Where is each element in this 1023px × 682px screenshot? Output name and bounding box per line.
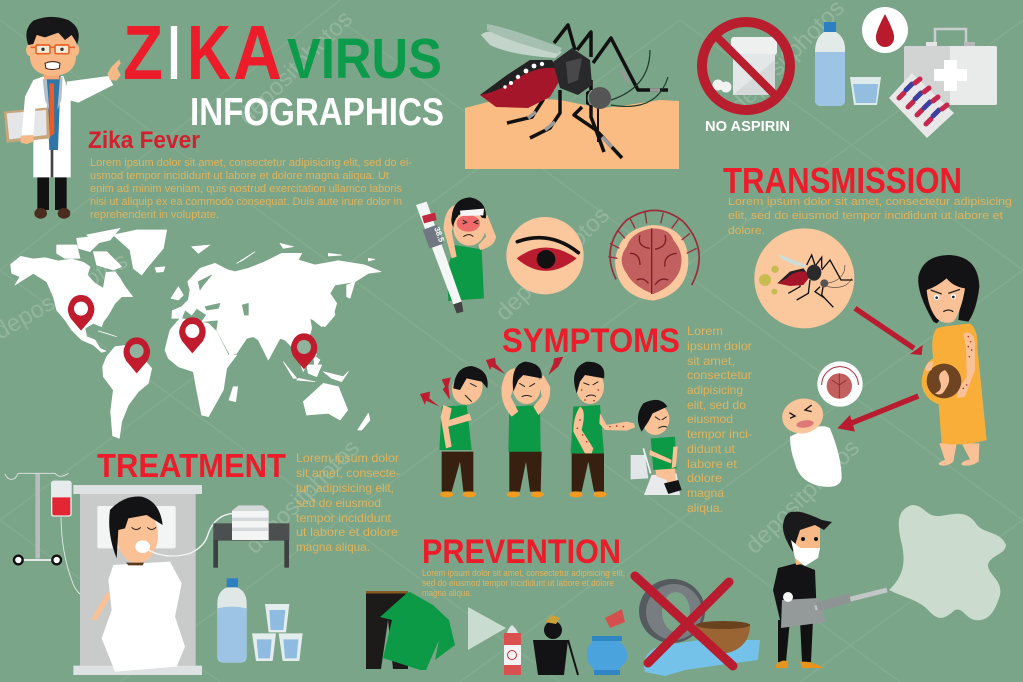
text block: prevention description: sed do eiusmod tempor incididunt ut labore et dolore: [422, 578, 614, 588]
text block: Zika Fever description: reprehenderit in voluptate.: [90, 209, 219, 221]
text block: symptoms description: magna: [687, 486, 724, 500]
text block: symptoms description: Lorem: [687, 324, 723, 338]
icon: pill blister pack: [889, 73, 954, 138]
text block: symptoms description: eiusmod: [687, 412, 733, 426]
patient: [91, 496, 185, 672]
thermometer: 38.5: [432, 226, 446, 244]
text block: treatment description: sed do eiusmod: [296, 496, 381, 510]
skin: [465, 97, 679, 169]
title: ZIKA VIRUS INFOGRAPHICS: Z: [123, 10, 163, 96]
pregnant woman: [918, 255, 987, 466]
text block: transmission description: [728, 196, 1012, 237]
pin: North America: [68, 295, 94, 331]
map: Americas and Greenland: [11, 228, 167, 438]
text block: symptoms description: labore et: [687, 457, 738, 471]
heading: TRANSMISSION: TRANSMISSION: [723, 160, 962, 201]
text block: symptoms description: elit, sed do: [687, 398, 746, 412]
icon: trash bin: [533, 615, 578, 675]
icon: glass of water: [850, 77, 881, 105]
arrow: triangle: [468, 607, 506, 650]
icon: crossed-out tyre, bowl and puddle: [635, 576, 760, 676]
icon: brain with pain arc: [608, 210, 699, 301]
text block: treatment description: sit amet, consecte-: [296, 466, 400, 480]
figure: diarrhea on toilet: [631, 400, 682, 495]
title: ZIKA VIRUS INFOGRAPHICS: K: [187, 10, 231, 96]
man spraying fog: [773, 512, 887, 668]
text block: treatment description: ut labore et dolore: [296, 525, 398, 539]
text block: symptoms description: tempor inci-: [687, 427, 752, 441]
heading: Zika Fever: Zika Fever: [88, 127, 200, 154]
oxygen tube and machine: [148, 505, 289, 568]
heading: TREATMENT: TREATMENT: [97, 447, 286, 484]
icon: insect repellent spray: [504, 625, 521, 675]
pin: Africa: [179, 317, 206, 353]
pin: South America: [124, 337, 150, 373]
text block: Zika Fever description: Lorem ipsum dolor sit amet, consectetur adipisicing elit, sed do ei-: [90, 157, 412, 169]
icon: water bottle: [815, 22, 845, 106]
heading: SYMPTOMS: SYMPTOMS: [502, 322, 680, 360]
text block: symptoms description: dolore: [687, 471, 722, 485]
text block: prevention description: [422, 568, 625, 598]
symptom icons and figures: [416, 197, 699, 497]
arrow: mother to baby: [837, 396, 918, 432]
legs: [507, 25, 668, 158]
text block: symptoms description: [687, 324, 752, 515]
transmission illustration: [754, 228, 987, 487]
watermark: depositphotos: [240, 434, 365, 559]
label: NO ASPIRIN: NO ASPIRIN: [705, 118, 790, 135]
abdomen: [480, 60, 560, 108]
text block: treatment description: magna aliqua.: [296, 540, 370, 554]
text block: symptoms description: ipsum dolor: [687, 339, 752, 353]
figure: shoulder pain: [420, 366, 488, 497]
fog cloud: [889, 505, 1006, 620]
water bottle: [217, 578, 247, 663]
title: ZIKA VIRUS INFOGRAPHICS: I: [168, 10, 180, 96]
text block: symptoms description: sit amet,: [687, 354, 735, 368]
icon: microcephaly brain: [817, 361, 863, 407]
title: ZIKA VIRUS INFOGRAPHICS: VIRUS: [287, 27, 442, 91]
text block: transmission description: dolore.: [728, 225, 765, 237]
text block: symptoms description: adipisicing: [687, 383, 743, 397]
text block: prevention description: Lorem ipsum dolor sit amet, consectetur adipisicing elit,: [422, 568, 625, 578]
world map with location pins: [11, 228, 381, 438]
treatment illustration: [5, 473, 303, 675]
thermometer: [416, 202, 463, 313]
thorax: [553, 48, 592, 95]
IV stand and drip: [5, 473, 107, 600]
watermark: [0, 0, 865, 559]
text block: transmission description: Lorem ipsum dolor sit amet, consectetur adipisicing: [728, 196, 1012, 208]
icon: water jar and litter: [587, 609, 627, 675]
figure: rash: [569, 362, 635, 497]
glasses of water: [252, 604, 303, 661]
text block: treatment description: tur, adipisicing elit,: [296, 481, 394, 495]
mosquito circle: [754, 228, 854, 328]
icon: red eye: [506, 217, 584, 294]
text block: treatment description: tempor incididunt: [296, 511, 392, 525]
icon: first aid kit: [904, 29, 997, 105]
title: ZIKA VIRUS INFOGRAPHICS: A: [233, 10, 282, 96]
watermark: depositphotos: [233, 5, 358, 130]
icon: blood drop: [862, 7, 908, 53]
doctor character: [4, 17, 121, 219]
text block: Zika Fever description: [90, 157, 412, 221]
man with fever and thermometer: [443, 197, 496, 301]
baby: [779, 395, 842, 487]
pin: South-East Asia: [291, 333, 317, 369]
text block: Zika Fever description: enim ad minim veniam, quis nostrud exercitation ullamco laboris: [90, 183, 402, 195]
hospital bed: [73, 485, 202, 675]
text block: symptoms description: aliqua.: [687, 501, 723, 515]
text block: Zika Fever description: usmod tempor incididunt ut labore et dolore magna aliqua. Ut: [90, 170, 389, 182]
watermark: depositphotos: [740, 434, 865, 559]
arrow: mosquito to mother: [855, 308, 923, 355]
icon: no aspirin: [702, 22, 790, 110]
text block: symptoms description: consectetur: [687, 368, 752, 382]
title: ZIKA VIRUS INFOGRAPHICS: [123, 10, 444, 134]
text block: transmission description: elit, sed do eiusmod tempor incididunt ut labore et: [728, 210, 1003, 222]
text block: treatment description: Lorem ipsum dolor: [296, 451, 399, 465]
figure: headache: [486, 357, 563, 497]
text block: treatment description: [296, 451, 400, 554]
illustration: mosquito biting skin: [465, 24, 679, 169]
text block: prevention description: magna aliqua.: [422, 588, 472, 598]
head: [589, 87, 611, 109]
watermark: depositphotos: [490, 201, 615, 326]
pins: [68, 295, 317, 373]
heading: PREVENTION: PREVENTION: [422, 533, 621, 571]
protective clothing: trousers and shirt: [366, 591, 455, 670]
title: ZIKA VIRUS INFOGRAPHICS: INFOGRAPHICS: [190, 91, 444, 134]
text block: Zika Fever description: nisi ut aliquip ex ea commodo consequat. Duis aute irure dolor in: [90, 196, 402, 208]
map: Europe, Asia, Africa and Oceania: [165, 243, 381, 430]
text block: symptoms description: didunt ut: [687, 442, 736, 456]
wings: [481, 24, 562, 58]
